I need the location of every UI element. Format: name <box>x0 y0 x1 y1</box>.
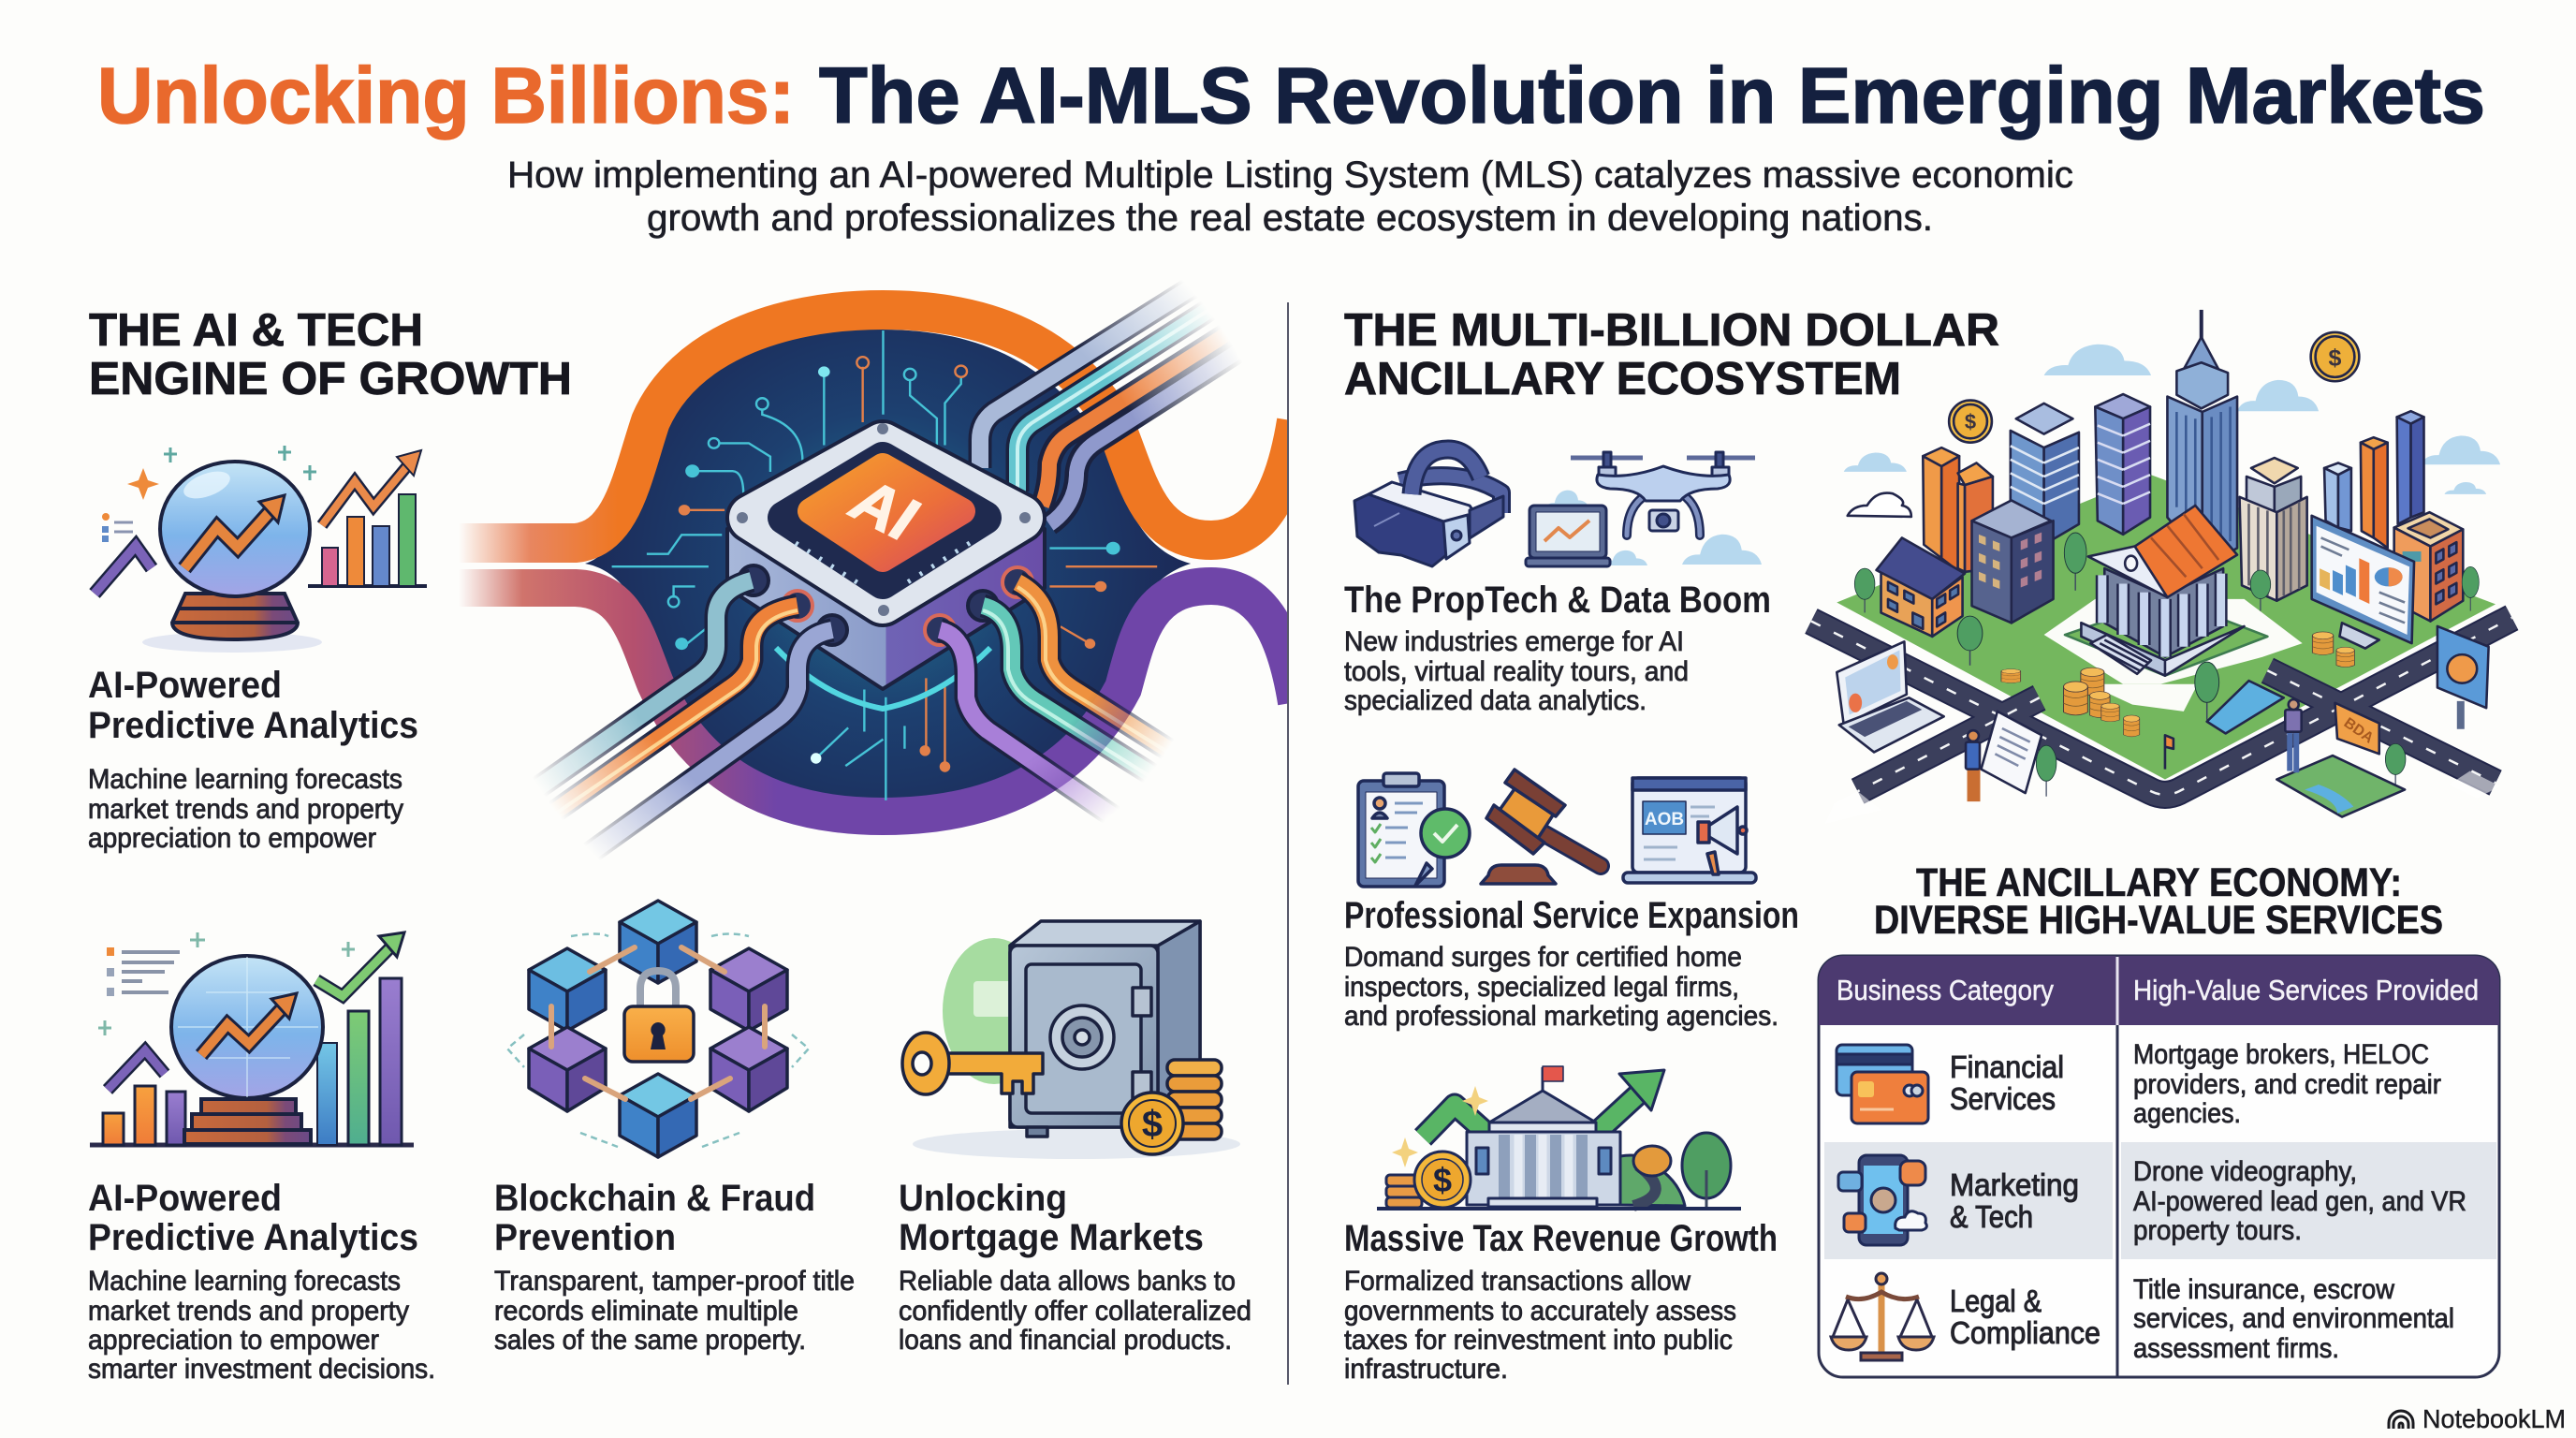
skyscraper <box>2167 310 2237 568</box>
heading: multi-billion dollar ancillary ecosystem: ANCILLARY ECOSYSTEM <box>1344 354 1901 404</box>
item heading <box>88 665 418 746</box>
item description: Machine learning forecasts <box>88 1266 401 1297</box>
item description <box>88 764 403 854</box>
heading: ancillary economy: DIVERSE HIGH-VALUE SERVICES <box>1874 898 2443 943</box>
item description: market trends and property <box>88 1296 409 1327</box>
dashboard monitor <box>2312 516 2414 649</box>
row: financial services: Services <box>1950 1081 2056 1116</box>
document and person <box>1966 712 2042 801</box>
item description: tools, virtual reality tours, and <box>1344 656 1689 687</box>
row: marketing and tech <box>1838 1155 2466 1246</box>
row: financial services: agencies. <box>2133 1098 2241 1129</box>
coins floating: $ <box>2329 345 2342 372</box>
title <box>97 51 2485 139</box>
trees <box>1854 533 2479 797</box>
row: legal and compliance: assessment firms. <box>2133 1333 2339 1364</box>
heading: AI and tech engine of growth: THE AI & TECH <box>89 305 423 356</box>
item: AI predictive analytics (upper) <box>88 446 427 854</box>
icon: clipboard, gavel and marketing laptop: AOB <box>1645 810 1684 829</box>
chip top plate <box>752 446 1020 601</box>
table frame <box>1819 956 2499 1377</box>
item description <box>1344 626 1689 716</box>
item heading: Prevention <box>494 1217 676 1258</box>
ground <box>1837 475 2496 780</box>
row: legal and compliance: Title insurance, escrow <box>2133 1274 2394 1305</box>
item description: Reliable data allows banks to <box>899 1266 1236 1297</box>
item description: and professional marketing agencies. <box>1344 1001 1778 1032</box>
item description <box>1344 1266 1736 1385</box>
divider <box>1287 302 1289 1385</box>
heading: multi-billion dollar ancillary ecosystem: THE MULTI-BILLION DOLLAR <box>1344 305 1999 356</box>
icon: safe with key and coins <box>902 921 1240 1159</box>
row: marketing and tech: Drone videography, <box>2133 1156 2357 1187</box>
row: marketing and tech: Marketing <box>1950 1167 2079 1202</box>
heading: ancillary economy <box>1874 860 2443 943</box>
heading: AI and tech engine of growth: ENGINE OF GROWTH <box>89 354 572 404</box>
item heading: Professional Service Expansion <box>1344 895 1799 936</box>
icon: crystal ball with rising chart <box>95 446 427 653</box>
laptop <box>1837 641 1944 752</box>
coins floating: $ <box>1965 410 1976 433</box>
central AI chip illustration <box>459 271 1296 880</box>
item description: appreciation to empower <box>88 1325 379 1356</box>
icon: scales of justice <box>1831 1273 1934 1360</box>
heading: ancillary economy: THE ANCILLARY ECONOMY: <box>1916 860 2402 905</box>
item description: market trends and property <box>88 794 403 825</box>
row: financial services: Mortgage brokers, HELOC <box>2133 1039 2429 1070</box>
item heading: Blockchain & Fraud <box>494 1178 815 1219</box>
item description: Transparent, tamper-proof title <box>494 1266 855 1297</box>
item heading: AI-Powered <box>88 1178 282 1219</box>
item description: Formalized transactions allow <box>1344 1266 1690 1297</box>
blue glass tower <box>2011 404 2079 545</box>
icon: credit cards <box>1837 1045 1928 1123</box>
table header <box>1819 956 2499 1025</box>
subtitle <box>507 154 2073 239</box>
row: legal and compliance: services, and environmental <box>2133 1303 2454 1334</box>
row: financial services <box>1837 1039 2441 1129</box>
icon: blockchain ring with padlock <box>507 901 809 1157</box>
AI label: AI <box>837 467 932 552</box>
coin piles <box>2001 632 2354 737</box>
title: The AI-MLS Revolution in Emerging Markets <box>819 51 2485 139</box>
icon: crystal ball with growth bars <box>90 932 414 1145</box>
row: financial services: Financial <box>1950 1049 2064 1084</box>
icon: smartphone with chat bubbles <box>1838 1155 1926 1245</box>
icon: government building with coins and green arrow <box>1377 1066 1741 1209</box>
striped purple tower <box>2095 394 2150 535</box>
item description <box>1344 942 1778 1032</box>
item heading: AI-Powered <box>88 665 282 706</box>
chip body <box>727 529 1045 689</box>
item: proptech and data boom <box>1344 449 1771 716</box>
map, sign and person <box>2276 699 2405 817</box>
item heading: Mortgage Markets <box>899 1217 1204 1258</box>
heading: multi-billion dollar ancillary ecosystem <box>1344 305 1999 404</box>
item description <box>899 1266 1251 1356</box>
item description: smarter investment decisions. <box>88 1354 435 1385</box>
bank with orange roof <box>2081 506 2245 676</box>
house <box>1877 537 1965 637</box>
bars right <box>2324 411 2424 548</box>
NotebookLM watermark: NotebookLM <box>2422 1404 2566 1433</box>
item heading <box>899 1178 1204 1258</box>
item description: sales of the same property. <box>494 1325 806 1356</box>
item: unlocking mortgage markets <box>899 921 1251 1356</box>
item description: taxes for reinvestment into public <box>1344 1325 1733 1356</box>
item: AI predictive analytics (lower) <box>88 932 435 1385</box>
table header: High-Value Services Provided <box>2133 974 2479 1006</box>
orange bars <box>1923 448 1993 572</box>
row: marketing and tech: & Tech <box>1950 1199 2033 1234</box>
item heading: The PropTech & Data Boom <box>1344 580 1771 621</box>
item description: infrastructure. <box>1344 1354 1508 1385</box>
item description <box>494 1266 855 1356</box>
row: legal and compliance <box>1831 1273 2454 1364</box>
item description: specialized data analytics. <box>1344 685 1647 716</box>
icon: safe with key and coins: $ <box>1142 1104 1163 1145</box>
item description: loans and financial products. <box>899 1325 1232 1356</box>
flag <box>2165 735 2174 770</box>
beige tower <box>2240 458 2307 601</box>
pool <box>2207 681 2284 733</box>
item: blockchain and fraud prevention <box>494 901 855 1356</box>
icon: clipboard, gavel and marketing laptop <box>1358 770 1756 887</box>
item: professional service expansion <box>1344 770 1799 1032</box>
dark office building <box>1972 500 2054 623</box>
item: massive tax revenue growth <box>1344 1066 1778 1385</box>
item description: records eliminate multiple <box>494 1296 798 1327</box>
row: legal and compliance: Legal & <box>1950 1284 2042 1318</box>
item description: Machine learning forecasts <box>88 764 402 795</box>
table header: Business Category <box>1837 974 2054 1006</box>
icon: VR headset, drone and laptop <box>1354 449 1762 566</box>
chip teal glow arc <box>776 648 990 709</box>
item description: New industries emerge for AI <box>1344 626 1684 657</box>
subtitle: growth and professionalizes the real estate ecosystem in developing nations. <box>647 198 1933 239</box>
item heading <box>88 1178 418 1258</box>
data cables: upper right and lower left <box>535 283 1239 858</box>
billboard <box>2437 626 2489 729</box>
row: legal and compliance: Compliance <box>1950 1315 2100 1350</box>
orange band <box>459 310 1296 543</box>
item description: confidently offer collateralized <box>899 1296 1251 1327</box>
circuit traces <box>612 330 1157 800</box>
item description: inspectors, specialized legal firms, <box>1344 972 1739 1003</box>
item heading: Predictive Analytics <box>88 705 418 746</box>
isometric city illustration <box>1811 310 2512 824</box>
item heading: Predictive Analytics <box>88 1217 418 1258</box>
icon: government building with coins and green arrow: $ <box>1433 1161 1452 1199</box>
item heading: Massive Tax Revenue Growth <box>1344 1218 1778 1259</box>
subtitle: How implementing an AI-powered Multiple Listing System (MLS) catalyzes massive economic <box>507 154 2073 196</box>
roads <box>1811 618 2512 795</box>
row: marketing and tech: property tours. <box>2133 1215 2302 1246</box>
item description <box>88 1266 435 1385</box>
purple band <box>459 586 1296 816</box>
dark circuit oval <box>585 330 1191 803</box>
item heading <box>494 1178 815 1258</box>
heading: AI and tech engine of growth <box>89 305 572 404</box>
coins floating <box>1949 332 2359 443</box>
map, sign and person: BDA <box>2341 715 2377 747</box>
clouds <box>1844 345 2500 494</box>
item description: appreciation to empower <box>88 823 376 854</box>
brown building <box>2394 512 2463 622</box>
row: marketing and tech: AI-powered lead gen, and VR <box>2133 1186 2466 1217</box>
cable sockets <box>739 565 1032 645</box>
data cables: lower right <box>937 572 1171 821</box>
row: financial services: providers, and credit repair <box>2133 1069 2441 1100</box>
item description: Domand surges for certified home <box>1344 942 1742 973</box>
title: Unlocking Billions: <box>97 51 795 139</box>
item description: governments to accurately assess <box>1344 1296 1736 1327</box>
item heading: Unlocking <box>899 1178 1067 1219</box>
ancillary economy table <box>1819 956 2499 1377</box>
